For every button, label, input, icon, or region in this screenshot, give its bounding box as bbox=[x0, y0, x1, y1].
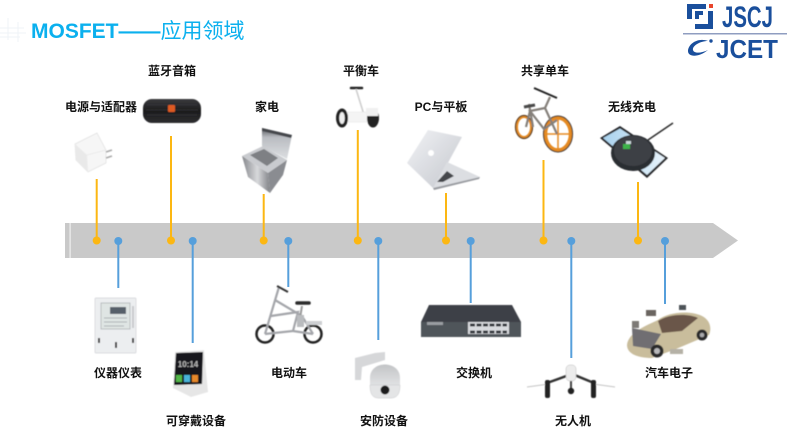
labels above the timeline: 家电 bbox=[255, 99, 279, 114]
labels below the timeline bbox=[94, 365, 693, 428]
icon: car electronics bbox=[627, 305, 710, 358]
labels below the timeline: 汽车电子 bbox=[645, 365, 693, 380]
labels above the timeline: 蓝牙音箱 bbox=[148, 63, 196, 78]
icon: network switch bbox=[421, 305, 521, 337]
title: MOSFET——应用领域 bbox=[31, 20, 244, 43]
yellow connectors and dots bbox=[93, 130, 642, 244]
icon: electric bicycle bbox=[256, 286, 322, 342]
labels above the timeline: 平衡车 bbox=[343, 63, 379, 78]
blue connectors and dots bbox=[114, 237, 669, 358]
icon: washing machine bbox=[242, 128, 292, 193]
icon: shared bicycle bbox=[516, 88, 572, 152]
icon: drone bbox=[527, 365, 615, 398]
icon: power adapter bbox=[75, 133, 112, 172]
icon: smartwatch: 10:14 bbox=[178, 360, 199, 369]
labels above the timeline: 共享单车 bbox=[521, 63, 569, 78]
icon: bluetooth speaker bbox=[143, 99, 201, 123]
labels below the timeline: 可穿戴设备 bbox=[166, 413, 226, 428]
icon: smartwatch bbox=[173, 350, 208, 397]
labels below the timeline: 交换机 bbox=[456, 365, 492, 380]
icon: self-balancing scooter bbox=[336, 88, 379, 128]
logo: JSCJ JCET: JSCJ bbox=[722, 1, 773, 34]
labels above the timeline: PC与平板 bbox=[415, 99, 467, 114]
icon: security camera bbox=[355, 352, 400, 398]
icon: wireless charger bbox=[600, 123, 673, 178]
labels above the timeline: 电源与适配器 bbox=[65, 99, 137, 114]
labels below the timeline: 安防设备 bbox=[360, 413, 408, 428]
labels below the timeline: 仪器仪表 bbox=[94, 365, 142, 380]
logo: JSCJ JCET: JCET bbox=[716, 34, 778, 64]
icon: laptop bbox=[407, 130, 480, 190]
labels below the timeline: 无人机 bbox=[555, 413, 591, 428]
timeline arrow bbox=[65, 223, 738, 258]
labels above the timeline: 无线充电 bbox=[608, 99, 656, 114]
labels above the timeline bbox=[65, 63, 656, 114]
decorative corner mark bbox=[0, 18, 26, 42]
icon: electric meter bbox=[95, 298, 136, 353]
logo: JSCJ JCET bbox=[683, 1, 787, 64]
labels below the timeline: 电动车 bbox=[271, 365, 307, 380]
